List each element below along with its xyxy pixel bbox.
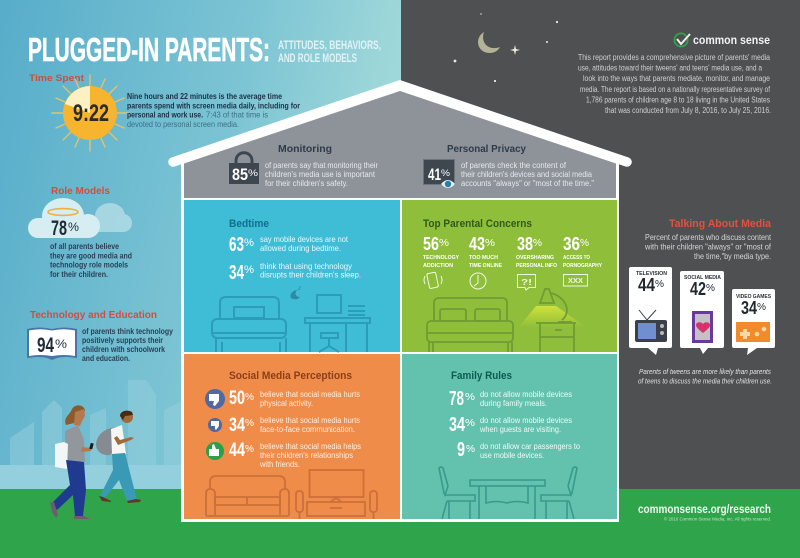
stat: 63%: % bbox=[244, 237, 254, 249]
panel: top parental concerns bbox=[402, 200, 617, 352]
stat: 50%: believe that social media hurts bbox=[260, 390, 360, 399]
icon: vibrating phone bbox=[424, 272, 442, 289]
heading: personal privacy: Personal Privacy bbox=[447, 144, 526, 155]
footer: url and copyright: commonsense.org/research bbox=[638, 504, 771, 516]
illustration: bed bbox=[427, 298, 513, 352]
stat: 43% too much time online: % bbox=[485, 237, 495, 249]
stat: 9%: use mobile devices. bbox=[480, 451, 544, 460]
illustration: sofa bbox=[206, 476, 289, 516]
text: report description: 1,786 parents of children age 8 to 18 living in the United States bbox=[586, 96, 770, 104]
icon: sleeping moon: z bbox=[297, 286, 301, 292]
icon: monitor with eye 41% bbox=[424, 160, 455, 188]
text: talking about media description bbox=[644, 233, 772, 261]
heading: family rules: Family Rules bbox=[451, 370, 512, 382]
stat: 44%: % bbox=[245, 443, 254, 455]
stat: 44%: 44 bbox=[229, 440, 245, 461]
stat: 36% access to pornography bbox=[563, 233, 603, 269]
stat: 44% bbox=[229, 440, 361, 469]
card: social media: % bbox=[706, 283, 715, 294]
icon: lock 85%: % bbox=[248, 168, 259, 179]
panel: personal privacy bbox=[424, 144, 594, 188]
heading: top parental concerns: Top Parental Concerns bbox=[423, 218, 532, 230]
icon: thumbs down small bbox=[208, 418, 222, 432]
text: role models description: for their children. bbox=[50, 270, 108, 279]
icon: lock 85% bbox=[229, 153, 259, 184]
text: report description: look into the ways that parents mediate, monitor, and manage bbox=[583, 74, 770, 83]
title: ATTITUDES, BEHAVIORS, bbox=[278, 40, 381, 52]
text: time spent description: devoted to personal screen media. bbox=[127, 120, 239, 129]
roof: gray attic bbox=[184, 91, 616, 198]
stat: 78%: 78 bbox=[51, 217, 67, 240]
card: television: 44 bbox=[638, 275, 655, 295]
stat: 56% technology addiction: % bbox=[439, 237, 449, 249]
stat: 38% oversharing personal info: 38 bbox=[517, 233, 533, 254]
stat: 56% technology addiction: TECHNOLOGY bbox=[423, 255, 460, 261]
icon: tv bbox=[635, 310, 667, 342]
card: video games: % bbox=[757, 302, 766, 313]
icon: sun clock: 9:22 bbox=[73, 100, 109, 127]
illustration: tv and speakers bbox=[296, 470, 377, 519]
text: report description: This report provides a comprehensive picture of parents' media bbox=[578, 53, 771, 62]
text: talking about media description: Percent of parents who discuss content bbox=[645, 233, 772, 242]
stat: 63%: say mobile devices are not bbox=[260, 235, 349, 244]
stat: 63%: allowed during bedtime. bbox=[260, 244, 341, 253]
text: technology description bbox=[82, 327, 173, 363]
heading: role models: Role Models bbox=[51, 186, 110, 197]
stat: 56% technology addiction: 56 bbox=[423, 233, 439, 254]
text: role models description: of all parents believe bbox=[50, 242, 119, 251]
section: role models bbox=[28, 186, 132, 279]
stat: 34%: 34 bbox=[229, 262, 245, 284]
stat: 34% bbox=[229, 415, 360, 436]
icon: thumbs down large bbox=[205, 389, 225, 409]
text: tweens note: of teens to discuss the media their children use. bbox=[638, 376, 772, 386]
stat: 34%: do not allow mobile devices bbox=[480, 416, 572, 425]
text: technology description: children with schoolwork bbox=[82, 345, 165, 354]
stat: 34%: 34 bbox=[229, 415, 245, 436]
skyline bbox=[10, 380, 184, 465]
icon: sleeping moon bbox=[290, 286, 301, 299]
text: role models description: technology role models bbox=[50, 261, 128, 270]
icon: tablet with heart bbox=[692, 311, 713, 343]
text: tweens note: Parents of tweens are more likely than parents bbox=[639, 367, 771, 376]
stat: 38% oversharing personal info: PERSONAL INFO bbox=[516, 263, 557, 269]
house walls bbox=[181, 86, 619, 522]
icon: xxx box: XXX bbox=[568, 278, 583, 285]
icon: cloud with halo bbox=[28, 198, 100, 238]
text: report description: that was conducted from July 8, 2016, to July 25, 2016. bbox=[605, 106, 771, 115]
text: technology description: positively supports their bbox=[82, 336, 163, 345]
stat: 50%: % bbox=[245, 391, 254, 403]
stat: 63% bbox=[229, 234, 349, 256]
icon: monitor with eye 41%: 41 bbox=[428, 165, 441, 184]
text: time spent description: parents spend with screen media daily, including for bbox=[127, 101, 301, 110]
stat: 78%: % bbox=[68, 222, 79, 234]
icon: monitor with eye 41%: % bbox=[441, 168, 451, 179]
section: talking about media bbox=[629, 218, 775, 386]
heading: social media perceptions: Social Media Perceptions bbox=[229, 370, 352, 382]
icon: speech box bbox=[518, 274, 536, 290]
stat: 78%: do not allow mobile devices bbox=[480, 390, 572, 399]
logo: common sense: common sense bbox=[693, 35, 770, 47]
panel: bedtime bbox=[184, 200, 400, 352]
text: monitoring description bbox=[265, 161, 378, 188]
stat: 34%: % bbox=[244, 264, 254, 276]
stat: 9% bbox=[457, 439, 581, 461]
stat: 34%: % bbox=[245, 417, 254, 429]
stat: 78%: during family meals. bbox=[480, 399, 547, 408]
icon: sun clock bbox=[52, 75, 128, 151]
text: time spent description bbox=[127, 92, 301, 129]
stat: 78%: 78 bbox=[449, 388, 464, 410]
stat: 34% bbox=[449, 414, 572, 436]
icon: xxx box bbox=[564, 274, 588, 286]
card: television: % bbox=[655, 279, 664, 290]
heading: monitoring: Monitoring bbox=[278, 144, 332, 155]
stat: 9%: 9 bbox=[457, 439, 465, 461]
illustration: desk bbox=[305, 295, 370, 352]
title: PLUGGED-IN PARENTS: bbox=[28, 31, 270, 68]
stat: 38% oversharing personal info: % bbox=[533, 237, 542, 249]
icon: thumbs up bbox=[206, 442, 224, 460]
text: privacy description: accounts "always" or "most of the time." bbox=[461, 179, 594, 188]
icon: back cloud bbox=[91, 203, 132, 232]
stat: 36% access to pornography: ACCESS TO bbox=[563, 255, 590, 261]
stat: 44%: with friends. bbox=[259, 460, 300, 469]
card: video games: VIDEO GAMES bbox=[736, 294, 772, 300]
text: privacy description: their children's devices and social media bbox=[461, 170, 593, 179]
background: daytime sky bbox=[0, 0, 401, 490]
logo: common sense bbox=[674, 33, 770, 47]
panel: family rules bbox=[402, 354, 617, 519]
stat: 38% oversharing personal info: OVERSHARING bbox=[516, 255, 554, 261]
illustration: dining table and chairs bbox=[439, 467, 577, 519]
stat: 34%: face-to-face communication. bbox=[260, 425, 355, 434]
text: monitoring description: for their children's safety. bbox=[265, 179, 348, 188]
stat: 78% bbox=[449, 388, 572, 410]
text: time spent description: Nine hours and 22 minutes is the average time bbox=[127, 92, 282, 101]
stat: 56% technology addiction: ADDICTION bbox=[423, 263, 453, 269]
heading: talking about media: Talking About Media bbox=[669, 218, 772, 230]
icon: book: % bbox=[55, 339, 67, 351]
card: social media: SOCIAL MEDIA bbox=[684, 275, 721, 281]
card: video games: 34 bbox=[741, 298, 757, 318]
card: television: TELEVISION bbox=[636, 271, 667, 277]
stat: 34% bbox=[229, 262, 361, 284]
stat: 36% access to pornography: 36 bbox=[563, 233, 580, 254]
stat: 36% access to pornography: PORNOGRAPHY bbox=[563, 263, 603, 269]
text: privacy description bbox=[461, 161, 594, 188]
text: time spent description: personal and work use. bbox=[127, 111, 203, 120]
stat: 63%: 63 bbox=[229, 234, 244, 256]
stat: 34%: 34 bbox=[449, 414, 466, 436]
stat: 34%: believe that social media hurts bbox=[260, 416, 360, 425]
stat: 78%: % bbox=[465, 391, 475, 403]
icon: clock bbox=[470, 273, 486, 289]
illustration: nightstand and lamp bbox=[536, 289, 576, 352]
text: role models description: they are good media and bbox=[50, 251, 132, 260]
heading: technology and education: Technology and Education bbox=[30, 310, 157, 321]
stat: 36% access to pornography: % bbox=[580, 237, 589, 249]
footer: url and copyright bbox=[638, 504, 771, 522]
stars bbox=[454, 13, 558, 82]
background: night sky bbox=[401, 0, 800, 490]
stat: 50% bbox=[229, 388, 360, 409]
text: monitoring description: of parents say that monitoring their bbox=[265, 161, 378, 170]
stat: 9%: do not allow car passengers to bbox=[480, 442, 581, 451]
icon: book: 94 bbox=[37, 334, 54, 357]
text: report description bbox=[578, 53, 771, 115]
text: talking about media description: with their children "always" or "most of bbox=[644, 242, 772, 252]
section: time spent bbox=[29, 73, 301, 151]
illustration: woman walking bbox=[50, 405, 94, 519]
stat: 56% technology addiction bbox=[423, 233, 460, 269]
text: report description: use, attitudes toward their tweens' and teens' media use, and a bbox=[578, 64, 763, 72]
text: technology description: of parents think technology bbox=[82, 327, 173, 336]
stat: 50%: physical activity. bbox=[260, 399, 313, 408]
icon: lock 85%: 85 bbox=[232, 165, 248, 184]
panel: social media perceptions bbox=[184, 354, 400, 519]
heading: time spent: Time Spent bbox=[29, 73, 85, 84]
heading: bedtime: Bedtime bbox=[229, 218, 269, 230]
illustration: bed bbox=[212, 297, 286, 352]
stat: 34%: when guests are visiting. bbox=[479, 425, 561, 434]
text: role models description bbox=[50, 242, 132, 279]
icon: speech box: ?! bbox=[521, 278, 532, 287]
icon: moon bbox=[478, 32, 500, 53]
stat: 9%: % bbox=[466, 443, 475, 455]
house bbox=[173, 85, 627, 522]
stat: 43% too much time online: TIME ONLINE bbox=[469, 263, 503, 269]
card: video games bbox=[732, 289, 775, 355]
stat: 50%: 50 bbox=[229, 388, 245, 409]
stat: 38% oversharing personal info bbox=[516, 233, 557, 269]
card: social media: 42 bbox=[690, 279, 706, 299]
text: privacy description: of parents check the content of bbox=[461, 161, 567, 170]
stat: 43% too much time online: TOO MUCH bbox=[469, 255, 498, 261]
text: time spent description: 7:43 of that time is bbox=[206, 111, 268, 120]
roof: white outline bbox=[173, 85, 627, 162]
footer: url and copyright: © 2016 Common Sense Media, Inc. All rights reserved. bbox=[664, 516, 771, 522]
ground: green grass bbox=[0, 489, 800, 558]
illustration: boy walking bbox=[96, 411, 141, 503]
stat: 34%: think that using technology bbox=[260, 262, 352, 271]
illustration: light cone bbox=[519, 306, 586, 327]
stat: 34%: disrupts their children's sleep. bbox=[260, 270, 361, 280]
icon: book bbox=[27, 328, 77, 360]
card: television bbox=[629, 267, 672, 355]
stat: 43% too much time online bbox=[469, 233, 503, 269]
stat: 44%: believe that social media helps bbox=[260, 442, 361, 451]
section: technology and education bbox=[27, 310, 173, 363]
stat: 43% too much time online: 43 bbox=[469, 233, 485, 254]
title: AND ROLE MODELS bbox=[278, 53, 357, 65]
icon: game pad bbox=[736, 322, 770, 342]
text: technology description: and education. bbox=[82, 354, 130, 363]
text: talking about media description: the time,"by media type. bbox=[694, 252, 771, 261]
text: tweens note bbox=[638, 367, 772, 386]
panel: monitoring bbox=[229, 144, 378, 188]
card: social media bbox=[680, 271, 724, 354]
text: monitoring description: children's media use is important bbox=[265, 170, 376, 179]
ground band bbox=[0, 465, 184, 490]
stat: 34%: % bbox=[465, 417, 475, 429]
stat: 44%: their children's relationships bbox=[260, 451, 353, 460]
